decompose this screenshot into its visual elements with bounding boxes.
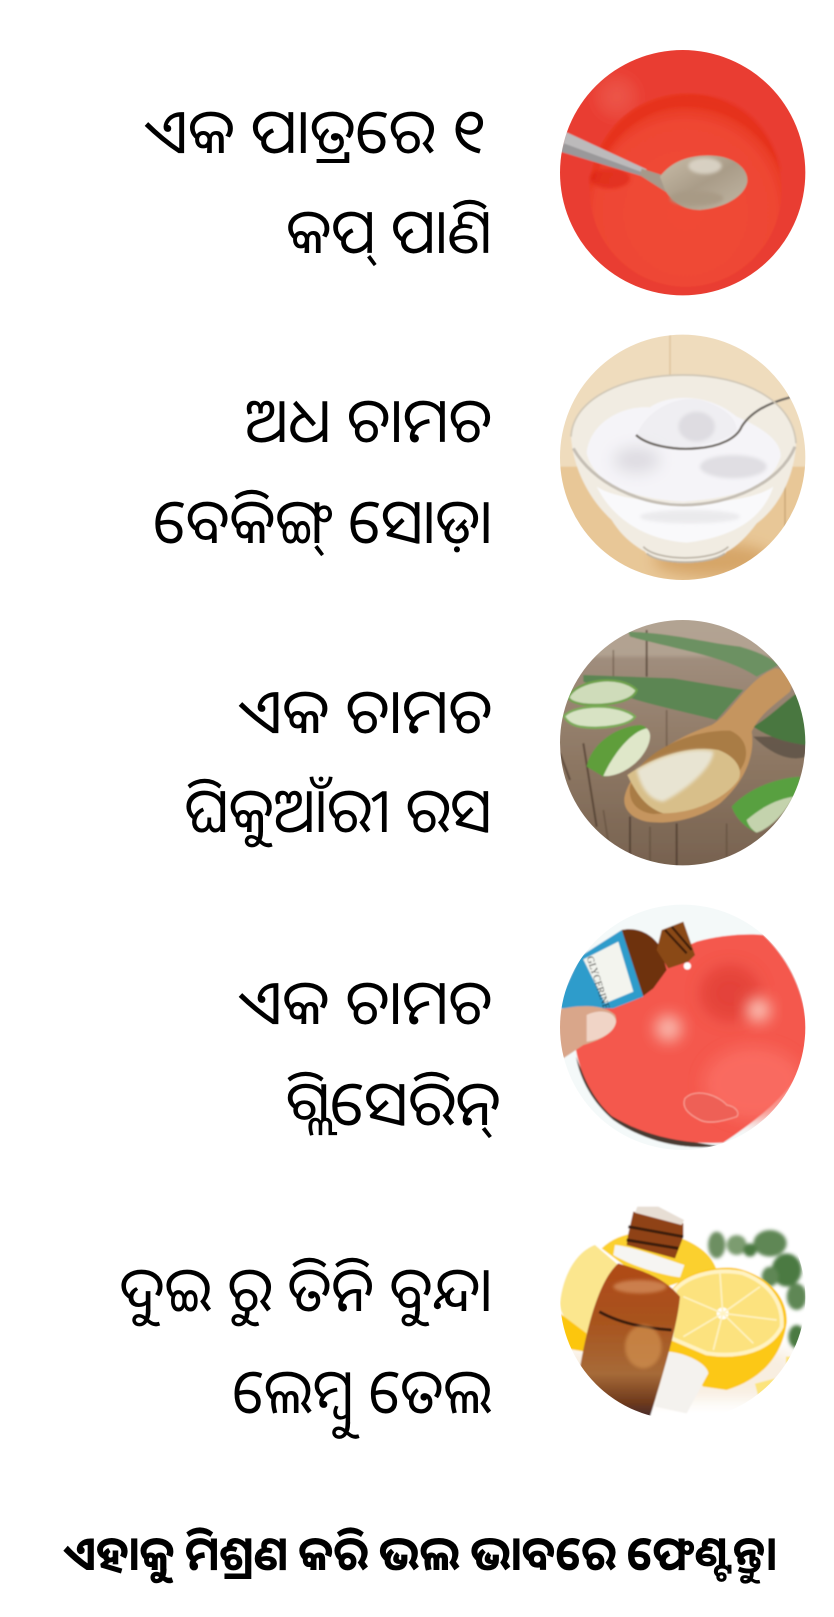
powder bbox=[587, 398, 781, 502]
text line: ବେକିଙ୍ଗ୍ ସୋଡ଼ା bbox=[153, 478, 492, 562]
icon: lemon oil bottle with lemons bbox=[560, 1206, 806, 1416]
amber bottle bbox=[578, 1263, 680, 1421]
spoon edge and handle bbox=[636, 397, 790, 449]
aloe leaves bbox=[628, 632, 778, 677]
closing instruction: ଏହାକୁ ମିଶ୍ରଣ କରି ଭଲ ଭାବରେ ଫେଣ୍ଟନ୍ତୁ। bbox=[64, 1520, 778, 1585]
icon: aloe vera gel in wooden spoon bbox=[560, 620, 806, 866]
text line: ଲେମ୍ବୁ ତେଲ bbox=[232, 1348, 492, 1432]
wooden spoon bbox=[624, 668, 791, 823]
text block: half spoon baking soda bbox=[153, 377, 492, 562]
icon: glycerine drop in red bowl bbox=[560, 905, 806, 1150]
text line: ଦୁଇ ରୁ ତିନି ବୁନ୍ଦା bbox=[119, 1246, 492, 1330]
text line: ଅଧ ଚାମଚ bbox=[245, 377, 492, 461]
text line: କପ୍ ପାଣି bbox=[286, 188, 492, 272]
icon: bowl of baking soda bbox=[560, 334, 806, 580]
aloe gel bbox=[627, 749, 740, 813]
illustration set: ingredient photos bbox=[560, 50, 806, 1416]
icon: glycerine drop in red bowl: GLYCERINE bbox=[584, 955, 611, 1011]
text block: one spoon aloe juice bbox=[185, 668, 492, 851]
bowl rim bbox=[573, 447, 795, 505]
text line: ଘିକୁଆଁରୀ ରସ bbox=[185, 767, 492, 851]
spoon bowl bbox=[660, 156, 747, 210]
spoon handle bbox=[561, 132, 647, 176]
text block: one cup of water bbox=[144, 88, 492, 272]
text line: ଏକ ଚାମଚ bbox=[239, 959, 492, 1043]
icon: red bowl of water with spoon bbox=[560, 50, 806, 296]
text line: ଏକ ଚାମଚ bbox=[239, 668, 492, 752]
text block: two to three drops lemon oil bbox=[119, 1246, 492, 1439]
foliage bbox=[708, 1230, 807, 1348]
bottle bbox=[622, 929, 667, 998]
text line: ଗ୍ଲିସେରିନ୍ bbox=[286, 1060, 501, 1144]
glass bowl bbox=[571, 375, 796, 563]
text line: ଏକ ପାତ୍ରରେ ୧ bbox=[145, 88, 486, 172]
bottle cap on table bbox=[655, 1352, 708, 1413]
text block: one spoon glycerine bbox=[238, 959, 501, 1144]
thumb bbox=[553, 1006, 616, 1058]
